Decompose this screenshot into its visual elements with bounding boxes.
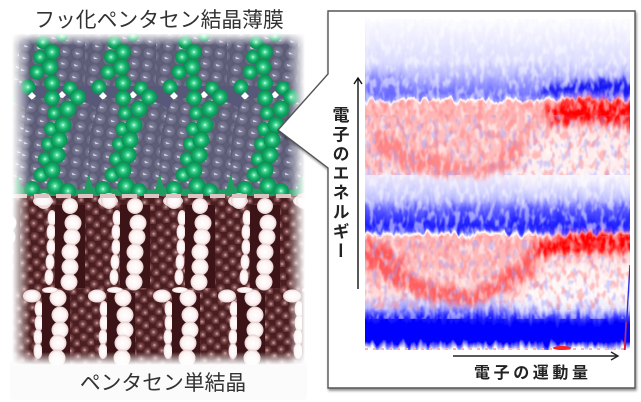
fluorinated pentacene thin film molecules: [12, 34, 304, 196]
callout: magnified spectrum frame: [278, 11, 635, 388]
arrow: momentum axis: [453, 352, 618, 360]
title: pentacene single crystal: ペンタセン単結晶: [80, 372, 246, 395]
bottom red trace: [365, 348, 625, 350]
pentacene single crystal molecules: [12, 193, 304, 364]
noise texture: [365, 19, 630, 319]
panel: molecular crystal structure: [0, 30, 380, 400]
chart: electronic band heatmap: [350, 19, 641, 350]
axis label: electron energy: 電子のエネルギー: [330, 106, 349, 261]
title: fluorinated pentacene thin film: フッ化ペンタセン結晶薄膜: [34, 9, 284, 32]
deep blue and red features: [355, 76, 640, 306]
axis label: electron momentum: 電子の運動量: [474, 364, 592, 382]
arrow: energy axis: [354, 78, 362, 289]
right edge line: [625, 265, 630, 350]
